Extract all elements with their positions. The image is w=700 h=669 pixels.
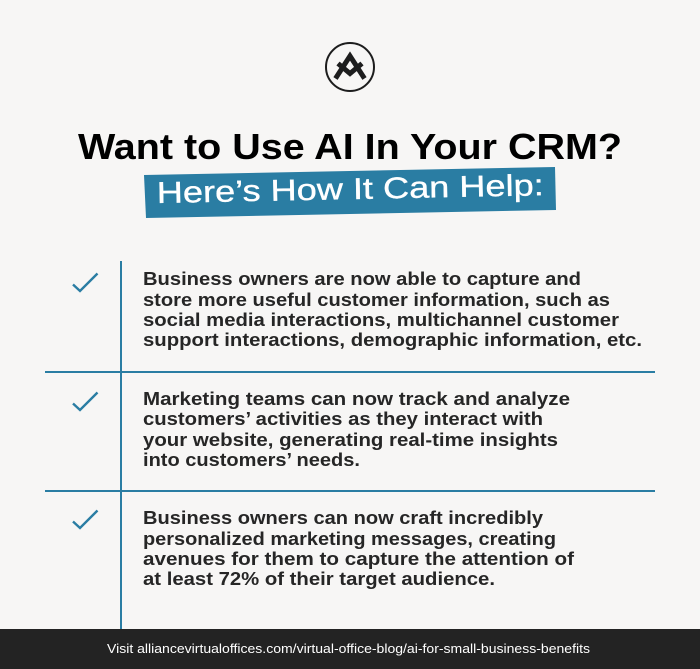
table dividers <box>45 261 655 629</box>
title: Want to Use AI In Your CRM? <box>78 126 622 167</box>
text block: customer information <box>143 269 642 350</box>
text block: marketing tracking: your website, generating real-time insights <box>143 430 558 450</box>
text block: customer information: store more useful customer information, such as <box>143 290 610 310</box>
text block: marketing tracking: customers’ activities as they interact with <box>143 409 543 429</box>
footer bar <box>0 629 700 669</box>
text block: marketing tracking: into customers’ needs. <box>143 450 360 470</box>
icon: check mark 3 <box>73 510 98 528</box>
text block: marketing tracking <box>143 389 570 470</box>
text block: customer information: social media interactions, multichannel customer <box>143 310 619 330</box>
text block: customer information: support interactions, demographic information, etc. <box>143 330 642 350</box>
text block: personalized messages: avenues for them to capture the attention of <box>143 549 575 569</box>
icon: logo <box>326 43 374 91</box>
text block: marketing tracking: Marketing teams can now track and analyze <box>143 389 570 409</box>
text block: personalized messages <box>143 508 575 589</box>
subtitle banner: Here’s How It Can Help: <box>156 169 544 210</box>
icon: check mark 1 <box>73 274 98 291</box>
text block: personalized messages: personalized marketing messages, creating <box>143 529 556 549</box>
subtitle banner <box>144 167 556 218</box>
text block: personalized messages: Business owners can now craft incredibly <box>143 508 543 528</box>
icon: check mark 2 <box>73 392 98 410</box>
text block: personalized messages: at least 72% of their target audience. <box>143 569 495 589</box>
text block: customer information: Business owners are now able to capture and <box>143 269 581 289</box>
footer bar: Visit alliancevirtualoffices.com/virtual-office-blog/ai-for-small-business-benefits <box>107 642 590 656</box>
